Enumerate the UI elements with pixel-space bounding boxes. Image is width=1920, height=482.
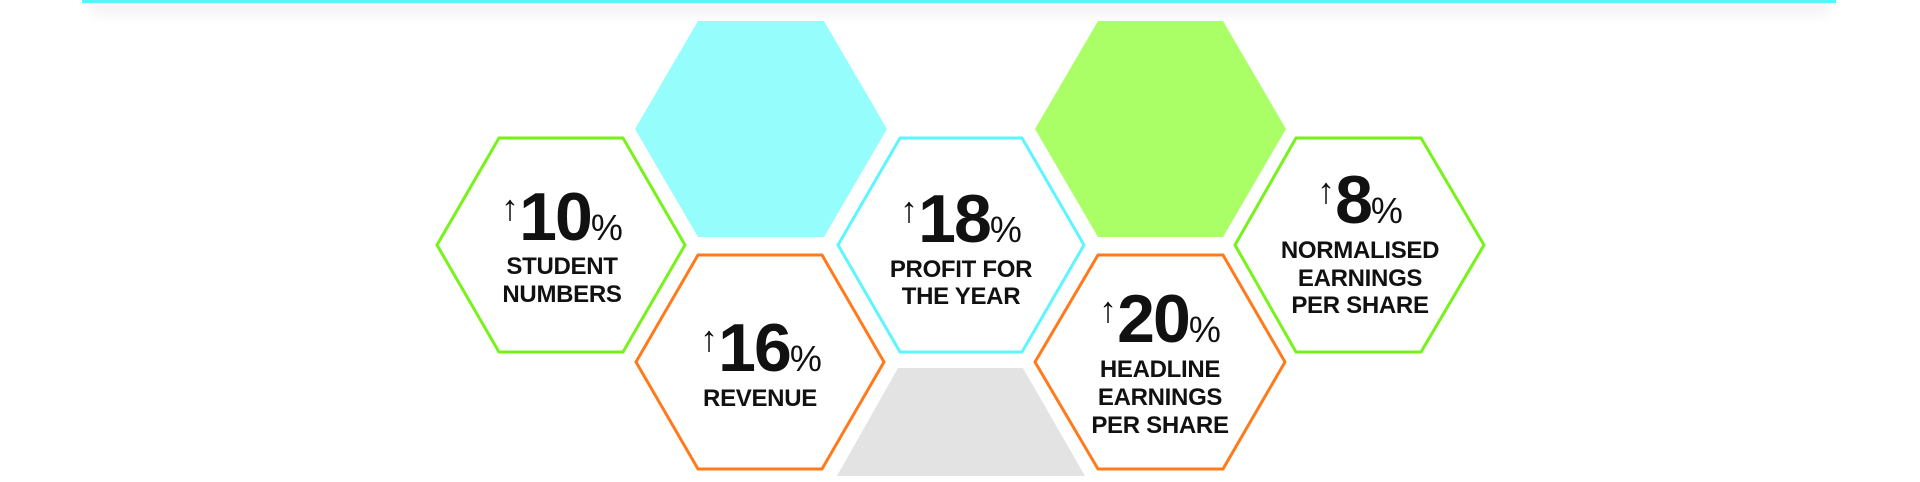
hex: student numbers: STUDENT	[506, 253, 618, 280]
hex: profit for the year: %	[990, 209, 1022, 250]
hex: student numbers: NUMBERS	[502, 281, 622, 308]
hex: profit for the year: THE YEAR	[902, 283, 1020, 310]
hex: normalised earnings per share: EARNINGS	[1298, 265, 1422, 292]
hex: headline earnings per share: EARNINGS	[1098, 384, 1222, 411]
hex: student numbers: 10	[519, 179, 591, 255]
hex: headline earnings per share: PER SHARE	[1091, 412, 1229, 439]
hex: profit for the year	[838, 138, 1084, 352]
hex: normalised earnings per share	[1235, 138, 1484, 352]
hex: normalised earnings per share: 8	[1335, 162, 1371, 238]
hex: profit for the year: 18	[918, 181, 990, 257]
hex: normalised earnings per share: ↑	[1317, 170, 1335, 211]
hex: green filled	[1035, 21, 1286, 237]
hex: normalised earnings per share: NORMALISED	[1281, 237, 1439, 264]
hex: gray partial	[837, 368, 1085, 476]
hex: profit for the year: ↑	[900, 189, 918, 230]
hex: headline earnings per share: 20	[1117, 281, 1189, 357]
hex: normalised earnings per share: %	[1371, 190, 1403, 231]
hex: cyan filled	[635, 21, 887, 237]
top bar	[82, 0, 1836, 24]
hex: headline earnings per share: HEADLINE	[1100, 356, 1220, 383]
hex: normalised earnings per share: PER SHARE	[1291, 292, 1429, 319]
hex: headline earnings per share: %	[1189, 309, 1221, 350]
hex: revenue: REVENUE	[703, 385, 817, 412]
hex: revenue: %	[790, 338, 822, 379]
hex: revenue	[636, 255, 884, 469]
hex: student numbers	[437, 138, 685, 352]
hex: headline earnings per share	[1035, 255, 1285, 469]
hex: student numbers: %	[591, 207, 623, 248]
hex: student numbers: ↑	[501, 187, 519, 228]
hex: profit for the year: PROFIT FOR	[890, 256, 1032, 283]
hex: headline earnings per share: ↑	[1099, 289, 1117, 330]
hex: revenue: 16	[718, 310, 790, 386]
hex: revenue: ↑	[700, 318, 718, 359]
